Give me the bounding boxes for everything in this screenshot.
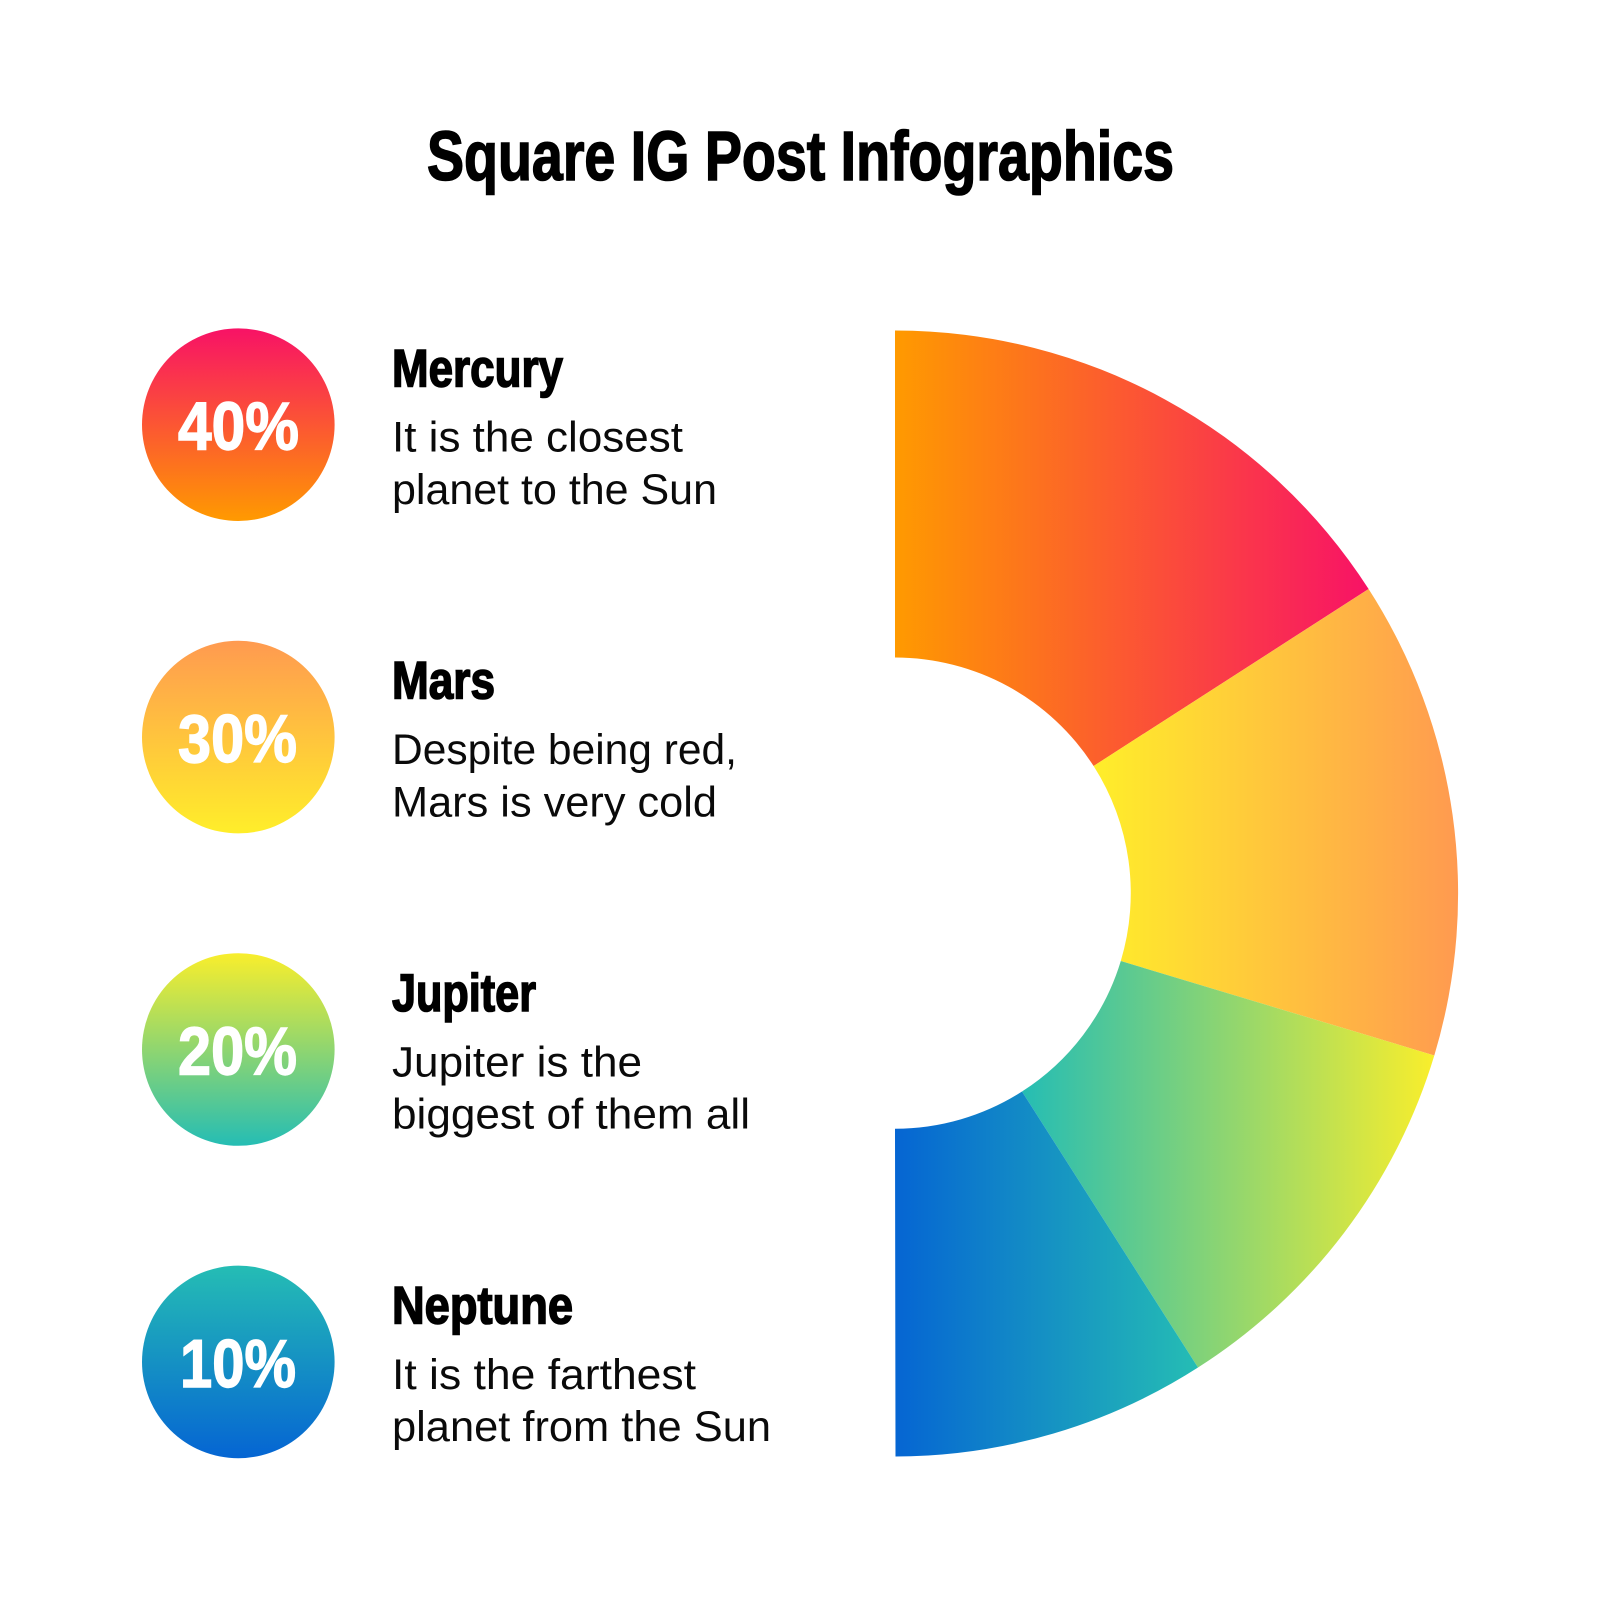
Mars description: Mars is very cold — [392, 779, 717, 826]
Neptune percent badge — [142, 1266, 335, 1458]
panel: Mercury row — [142, 328, 717, 521]
slice: Mars — [1094, 589, 1458, 1056]
Jupiter percent badge: 20% — [178, 1014, 297, 1090]
slice: Mercury — [895, 330, 1369, 766]
chart: semi-circular donut — [895, 330, 1458, 1456]
slice: Neptune — [895, 1092, 1198, 1456]
Mercury heading: Mercury — [392, 340, 563, 399]
Mars percent badge: 30% — [178, 701, 297, 777]
Jupiter description: Jupiter is the — [392, 1040, 642, 1086]
panel: Jupiter row — [142, 953, 750, 1146]
Mercury percent badge: 40% — [178, 389, 299, 465]
Jupiter heading: Jupiter — [392, 964, 536, 1023]
Neptune description — [392, 1352, 771, 1451]
panel: Mars row — [142, 641, 737, 833]
Neptune description: It is the farthest — [392, 1352, 696, 1399]
slice: Jupiter — [1022, 961, 1434, 1368]
panel: Neptune row — [142, 1266, 771, 1458]
title: Square IG Post Infographics — [427, 117, 1174, 195]
Mercury description: It is the closest — [392, 415, 683, 462]
Mars description: Despite being red, — [392, 727, 737, 774]
Jupiter percent badge — [142, 953, 335, 1146]
Mars description — [392, 727, 737, 826]
Mars heading: Mars — [392, 652, 495, 711]
Mercury description: planet to the Sun — [392, 467, 717, 514]
Neptune heading: Neptune — [392, 1276, 573, 1335]
Mars percent badge — [142, 641, 335, 833]
Neptune description: planet from the Sun — [392, 1404, 771, 1451]
Mercury percent badge — [142, 328, 335, 521]
Neptune percent badge: 10% — [180, 1326, 296, 1402]
Mercury description — [392, 415, 717, 514]
Jupiter description — [392, 1040, 750, 1138]
Jupiter description: biggest of them all — [392, 1091, 750, 1138]
